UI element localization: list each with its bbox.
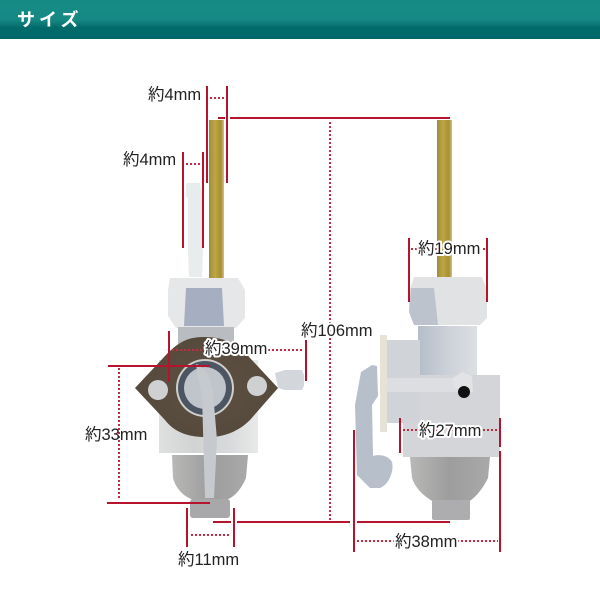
dimension: 約106mm height: 約106mm [301, 321, 373, 340]
flange [135, 337, 278, 437]
dimension: 約4mm hose width [123, 150, 203, 248]
hex nut [168, 278, 245, 328]
dimension: 約4mm tube width [148, 85, 227, 183]
right screw [247, 376, 267, 396]
header bar [0, 0, 600, 39]
dimension: 約33mm length [85, 366, 210, 503]
lever [355, 365, 392, 488]
dimension: 約4mm tube width: 約4mm [148, 85, 201, 104]
photo: fuel cock side view [355, 120, 500, 520]
dimension: 約39mm flange width: 約39mm [205, 339, 267, 358]
dimension: 約27mm body width [400, 418, 500, 552]
lever [196, 364, 217, 498]
dimension: 約11mm stud width: 約11mm [178, 550, 239, 569]
dimension: 約4mm hose width: 約4mm [123, 150, 176, 169]
white hose nipple [186, 183, 203, 277]
heading: サイズ [17, 9, 82, 30]
dimension: 約11mm stud width [178, 508, 239, 569]
brass tube [209, 120, 224, 280]
fuel bowl [172, 455, 248, 500]
dimension: 約39mm flange width [169, 331, 306, 382]
plate [380, 335, 387, 432]
outlet boss [453, 372, 473, 392]
dimension: 約33mm length: 約33mm [85, 425, 147, 444]
brass tube [437, 120, 452, 280]
left screw [148, 380, 168, 400]
drain stud [190, 499, 230, 518]
upper body [418, 326, 477, 378]
valve disc housing [385, 340, 420, 423]
side nipple [275, 370, 304, 390]
wide body [403, 375, 500, 457]
hex nut [409, 277, 487, 325]
photo: fuel cock front view [135, 120, 304, 518]
drain stud [432, 500, 470, 520]
dimension: 約27mm body width: 約27mm [419, 421, 481, 440]
dimension: 約19mm nut width: 約19mm [418, 239, 480, 258]
dimension: 約19mm nut width [409, 238, 487, 302]
valve opening [176, 359, 234, 417]
valve body [159, 360, 258, 453]
dimension: 約38mm overall width: 約38mm [395, 532, 457, 551]
outlet hole [458, 386, 470, 398]
dimension: 約106mm height [213, 118, 450, 522]
fuel bowl [410, 457, 490, 503]
